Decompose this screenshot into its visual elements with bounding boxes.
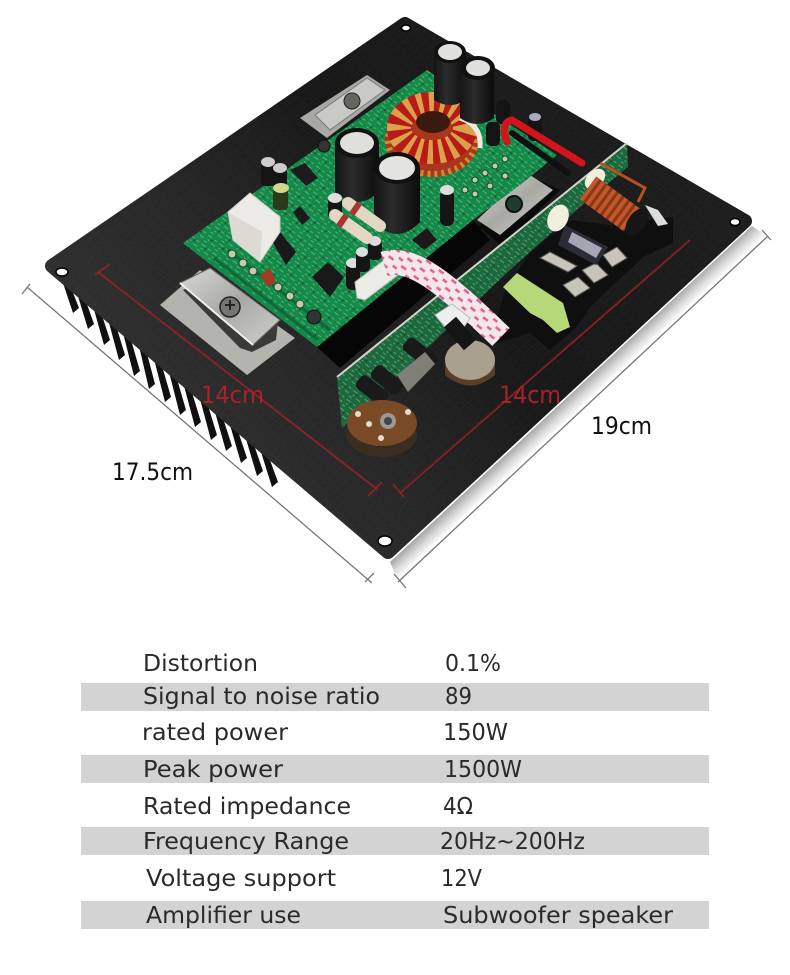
row: rated power: 150W — [443, 720, 508, 746]
bottom mounting clamp — [160, 268, 295, 375]
label: 17.5cm: 17.5cm — [112, 458, 193, 486]
large electrolytic capacitors — [335, 128, 420, 234]
shadow band below plate edge — [390, 226, 765, 578]
row: amplifier use: Subwoofer speaker — [443, 903, 674, 929]
flat ribbon cable — [384, 263, 501, 337]
label: 19cm: 19cm — [591, 412, 652, 440]
copper coil inductor — [588, 163, 668, 239]
row: rated power — [142, 720, 508, 746]
row: rated power: rated power — [142, 720, 289, 746]
toroid inductor — [385, 103, 480, 177]
shadow under main board — [317, 220, 490, 368]
row: rated impedance — [143, 794, 473, 820]
terminal block housing — [490, 217, 673, 350]
row: distortion — [143, 651, 501, 677]
white plastic posts — [543, 165, 609, 235]
mounting holes — [56, 25, 740, 546]
row: peak power: Peak power — [143, 757, 284, 783]
row: signal to noise ratio: Signal to noise ratio — [143, 684, 380, 710]
row: voltage support: Voltage support — [146, 866, 336, 892]
top right capacitors — [434, 41, 495, 124]
white relay — [228, 193, 280, 262]
row: rated impedance: 4Ω — [443, 794, 473, 820]
top mounting clamp — [300, 75, 390, 138]
row: peak power — [143, 757, 522, 783]
main green circuit board — [183, 70, 557, 347]
row: peak power: 1500W — [444, 757, 522, 783]
silver potentiometer — [445, 322, 495, 386]
silver component on side board — [397, 352, 435, 392]
dimension line: 17.5cm — [22, 284, 374, 583]
row: rated impedance: Rated impedance — [143, 794, 351, 820]
row: distortion: 0.1% — [445, 651, 501, 677]
row stripes — [81, 683, 709, 929]
row: distortion: Distortion — [143, 651, 258, 677]
board screw — [307, 310, 321, 324]
small capacitors and transistors — [260, 100, 542, 297]
board screw upper — [318, 140, 330, 152]
small connector on side board — [435, 304, 470, 330]
brushed texture — [46, 18, 751, 559]
spade terminals — [540, 247, 627, 297]
label: 14cm left: 14cm — [201, 381, 264, 409]
row: amplifier use — [146, 903, 674, 929]
red dimension line: 14cm right — [393, 240, 690, 497]
right mounting clamp — [477, 173, 560, 246]
red and black power wires — [504, 120, 582, 173]
dimension line: 19cm — [394, 230, 771, 588]
red dimension line: 14cm left — [95, 264, 382, 496]
label: 14cm right: 14cm — [499, 381, 561, 409]
side board black capacitors — [354, 336, 439, 407]
aluminium base plate — [52, 24, 745, 552]
heatsink fins — [62, 280, 278, 487]
green terminal connector — [503, 273, 570, 333]
solder pads row — [228, 156, 508, 308]
row: signal to noise ratio — [143, 684, 472, 710]
row: frequency range: 20Hz~200Hz — [440, 829, 585, 855]
row: voltage support: 12V — [441, 866, 482, 892]
row: frequency range: Frequency Range — [143, 829, 349, 855]
specification table — [81, 651, 709, 929]
row: amplifier use: Amplifier use — [146, 903, 301, 929]
side green circuit board — [337, 143, 628, 428]
row: frequency range — [143, 829, 585, 855]
row: voltage support — [146, 866, 482, 892]
product photo: amplifier board on heatsink plate — [22, 18, 771, 588]
blue electrolytic capacitor — [558, 225, 608, 265]
row: signal to noise ratio: 89 — [445, 684, 472, 710]
power resistors — [335, 203, 380, 238]
white connector — [355, 252, 402, 300]
brown potentiometer — [347, 400, 417, 457]
